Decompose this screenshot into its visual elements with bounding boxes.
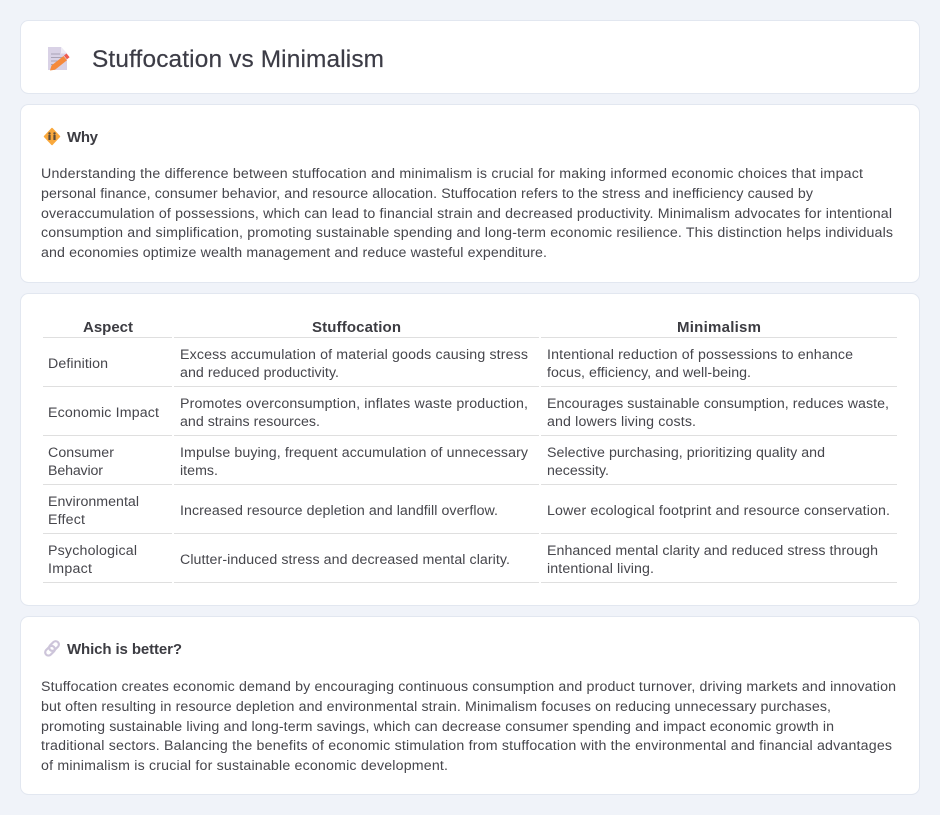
text block: why paragraph: [41, 166, 893, 261]
row: definition: focus, efficiency, and well-being.: [547, 365, 751, 381]
row: consumer behavior: Behavior: [48, 463, 103, 479]
row: economic impact: and lowers living costs.: [547, 414, 696, 430]
row: definition: Definition: [48, 356, 108, 372]
panel: why: [20, 104, 920, 282]
row: consumer behavior: Consumer: [48, 445, 114, 461]
title text: Stuffocation vs Minimalism: [92, 46, 384, 73]
row: psychological impact: Enhanced mental clarity and reduced stress through: [547, 543, 878, 559]
row: economic impact: Promotes overconsumption, inflates waste production,: [180, 396, 528, 412]
text block: which is better paragraph: traditional sectors. Balancing the benefits of economic stimulation from stuffocation with the environmental and financial advantages: [41, 738, 892, 754]
panel: which is better: [20, 616, 920, 794]
text block: why paragraph: and economies optimize wealth management and reduce wasteful expenditure.: [41, 245, 547, 261]
row: definition: Intentional reduction of possessions to enhance: [547, 347, 853, 363]
row: consumer behavior: Selective purchasing, prioritizing quality and: [547, 445, 825, 461]
panel: comparison table: [20, 294, 920, 606]
row: psychological impact: Clutter-induced stress and decreased mental clarity.: [180, 552, 510, 568]
heading: which is better: Which is better?: [67, 641, 182, 658]
row: definition: and reduced productivity.: [180, 365, 339, 381]
row: economic impact: Economic Impact: [48, 405, 159, 421]
text block: which is better paragraph: but often resulting in resource depletion and environmental strain. Minimalism focuses on reducing unnecessary purchases,: [41, 699, 831, 715]
text block: why paragraph: Understanding the difference between stuffocation and minimalism is crucial for making informed economic choices that impact: [41, 166, 863, 182]
row: environmental effect: Effect: [48, 512, 85, 528]
table header: Stuffocation: [312, 319, 401, 336]
row: consumer behavior: [48, 445, 825, 479]
text block: which is better paragraph: promoting sustainable living and long-term savings, which can decrease consumer spending and impact economic growth in: [41, 719, 834, 735]
row: psychological impact: [48, 543, 878, 577]
text block: which is better paragraph: [41, 679, 896, 774]
row: psychological impact: Impact: [48, 561, 92, 577]
text block: why paragraph: personal finance, consumer behavior, and resource allocation. Stuffocation refers to the stress and inefficiency caused by: [41, 186, 814, 202]
row: consumer behavior: necessity.: [547, 463, 609, 479]
table header: [83, 319, 761, 336]
row: consumer behavior: Impulse buying, frequent accumulation of unnecessary: [180, 445, 529, 461]
row: psychological impact: Psychological: [48, 543, 137, 559]
icon: chain link: [44, 640, 60, 657]
text block: why paragraph: consumption and simplification, promoting sustainable spending and long-term economic resilience. This distinction helps individuals: [41, 225, 893, 241]
icon: diamond road sign: [44, 128, 60, 144]
row: environmental effect: Increased resource depletion and landfill overflow.: [180, 503, 498, 519]
text block: why paragraph: overaccumulation of possessions, which can lead to financial strain and decreased productivity. Minimalism advocates for intentional: [41, 206, 892, 222]
panel: title: [20, 20, 920, 94]
row: environmental effect: [48, 494, 890, 528]
row: economic impact: Encourages sustainable consumption, reduces waste,: [547, 396, 889, 412]
table header: Aspect: [83, 319, 133, 336]
text block: which is better paragraph: of minimalism is crucial for sustainable economic development.: [41, 758, 448, 774]
heading: why: Why: [67, 129, 99, 146]
row: consumer behavior: items.: [180, 463, 218, 479]
row: environmental effect: Lower ecological footprint and resource conservation.: [547, 503, 890, 519]
row: definition: Excess accumulation of material goods causing stress: [180, 347, 528, 363]
row: definition: [48, 347, 853, 381]
text block: which is better paragraph: Stuffocation creates economic demand by encouraging continuous consumption and product turnover, driving markets and innovation: [41, 679, 896, 695]
icon: document with pencil: [48, 47, 70, 70]
row: economic impact: [48, 396, 889, 430]
row: environmental effect: Environmental: [48, 494, 139, 510]
table header: Minimalism: [677, 319, 761, 336]
row: economic impact: and strains resources.: [180, 414, 320, 430]
row: psychological impact: intentional living.: [547, 561, 654, 577]
